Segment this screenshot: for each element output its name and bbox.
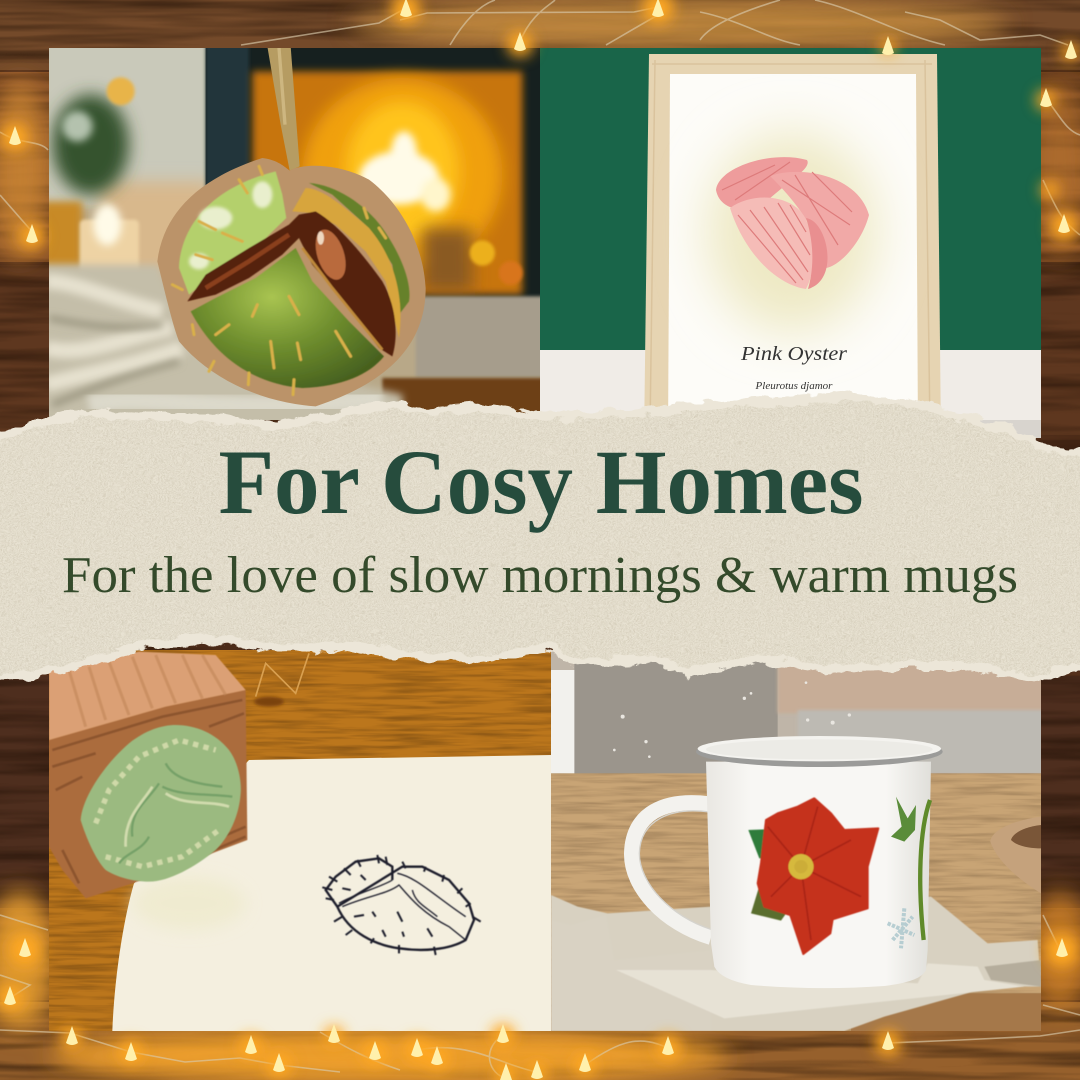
mug handle — [632, 803, 711, 937]
mug body — [706, 762, 931, 988]
wall — [42, 41, 209, 208]
pink oyster mushroom — [716, 157, 869, 289]
photo: chestnut rubber stamp on paper — [49, 650, 551, 1031]
lower husk — [191, 248, 384, 388]
knitted blanket — [36, 265, 402, 431]
photo: enamel mug with poinsettia — [548, 650, 1044, 1031]
light bulbs — [400, 0, 412, 17]
print paper — [668, 74, 918, 440]
wooden ornament blank — [157, 158, 426, 406]
subheading: For the love of slow mornings & warm mugs — [62, 547, 1018, 604]
snowflake — [888, 908, 914, 948]
print subtitle: Pleurotus djamor — [755, 380, 833, 392]
wooden stamp block — [49, 652, 247, 898]
chestnut seed and shell — [187, 211, 396, 356]
wooden bowl — [990, 817, 1041, 893]
table — [49, 650, 551, 1031]
right husk — [309, 183, 410, 315]
picture frame — [644, 54, 941, 440]
poinsettia — [748, 798, 878, 954]
fireplace — [206, 45, 542, 301]
torn paper banner — [0, 392, 1080, 682]
candle — [78, 218, 140, 268]
heading: For Cosy Homes — [218, 431, 864, 533]
linen napkin — [551, 895, 1041, 1031]
wooden table — [551, 773, 1041, 1031]
stamped chestnut print — [322, 855, 481, 955]
ornament ribbon — [267, 46, 300, 171]
green leaf and stem — [891, 797, 930, 940]
green stamp die — [81, 725, 241, 882]
mug rim — [696, 736, 943, 767]
photo: chestnut ornament by the fireplace — [36, 41, 549, 431]
sheet of paper — [112, 755, 551, 1031]
photo: framed pink oyster mushroom print — [540, 48, 1041, 440]
mantel — [416, 296, 549, 378]
blurred interior — [574, 662, 778, 774]
yellow shell — [292, 188, 400, 338]
print title: Pink Oyster — [740, 343, 847, 365]
plant and bauble — [52, 95, 129, 195]
light husk — [179, 171, 286, 295]
yellow spines — [172, 166, 386, 395]
